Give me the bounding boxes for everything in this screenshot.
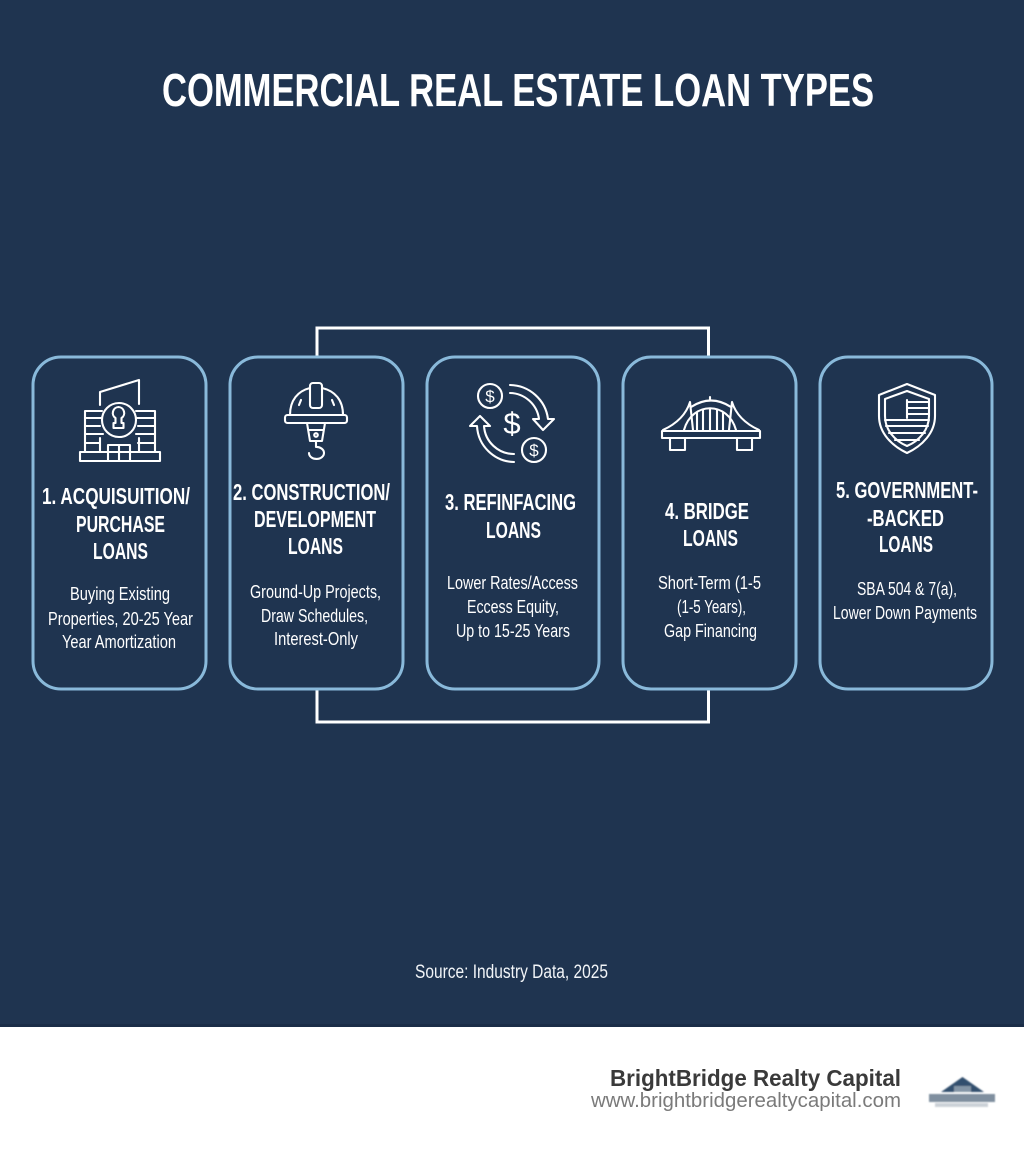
description: Lower Down Payments [833, 602, 977, 623]
description: Buying Existing [70, 583, 170, 604]
heading [445, 489, 576, 543]
description: Up to 15-25 Years [456, 620, 570, 641]
panel: acquisition loans [33, 357, 206, 689]
heading: 2. CONSTRUCTION/ [233, 479, 390, 505]
heading [233, 479, 390, 559]
connector bracket: top [317, 328, 708, 357]
heading: -BACKED [867, 505, 944, 531]
footer edge shadow [0, 1024, 1024, 1028]
icon: dollar signs: $ [485, 387, 495, 406]
card outline [623, 357, 796, 689]
description [250, 581, 381, 649]
description: Interest-Only [274, 628, 359, 649]
description: Short-Term (1-5 [658, 572, 761, 593]
card outline [33, 357, 206, 689]
source note: Source: Industry Data, 2025 [415, 962, 608, 983]
heading [665, 498, 749, 551]
heading: LOANS [93, 538, 148, 564]
heading: DEVELOPMENT [254, 506, 376, 532]
description [833, 578, 977, 623]
icon: dollar signs: $ [503, 406, 521, 441]
icon: flag shield [879, 384, 935, 453]
card outline [427, 357, 599, 689]
panel: bridge loans [623, 357, 796, 689]
description: Year Amortization [62, 631, 176, 652]
footer band [0, 1027, 1024, 1154]
connector bracket: bottom [317, 689, 708, 722]
card outline [820, 357, 992, 689]
description: SBA 504 & 7(a), [857, 578, 957, 599]
icon: bridge [662, 397, 760, 450]
footer: company name: BrightBridge Realty Capital [610, 1065, 901, 1091]
heading: LOANS [486, 517, 541, 543]
description: (1-5 Years), [677, 596, 746, 617]
heading: 4. BRIDGE [665, 498, 749, 524]
heading: 1. ACQUISUITION/ [42, 483, 190, 509]
description: Ground-Up Projects, [250, 581, 381, 602]
panel: refinancing loans [427, 357, 599, 689]
description [447, 572, 578, 641]
icon: dollar signs [485, 387, 539, 460]
heading: PURCHASE [76, 511, 165, 537]
footer: website: www.brightbridgerealtycapital.com [590, 1090, 901, 1112]
panel: government-backed loans [820, 357, 992, 689]
heading: LOANS [879, 531, 933, 557]
heading: LOANS [683, 525, 738, 551]
panel: construction loans [230, 357, 403, 689]
icon: building with keyhole [80, 380, 160, 461]
description: Eccess Equity, [467, 596, 559, 617]
card outline [230, 357, 403, 689]
description: Lower Rates/Access [447, 572, 578, 593]
footer: logo [929, 1077, 995, 1107]
description [658, 572, 761, 641]
icon: hard hat with hook [285, 383, 347, 459]
description: Draw Schedules, [261, 605, 368, 626]
description [48, 583, 193, 652]
description: Gap Financing [664, 620, 757, 641]
icon: dollar signs: $ [529, 441, 539, 460]
description: Properties, 20-25 Year [48, 608, 193, 629]
heading: LOANS [288, 533, 343, 559]
heading [836, 477, 978, 557]
heading: 3. REFINFACING [445, 489, 576, 515]
heading [42, 483, 190, 564]
icon: circular dollar arrows [470, 384, 554, 462]
